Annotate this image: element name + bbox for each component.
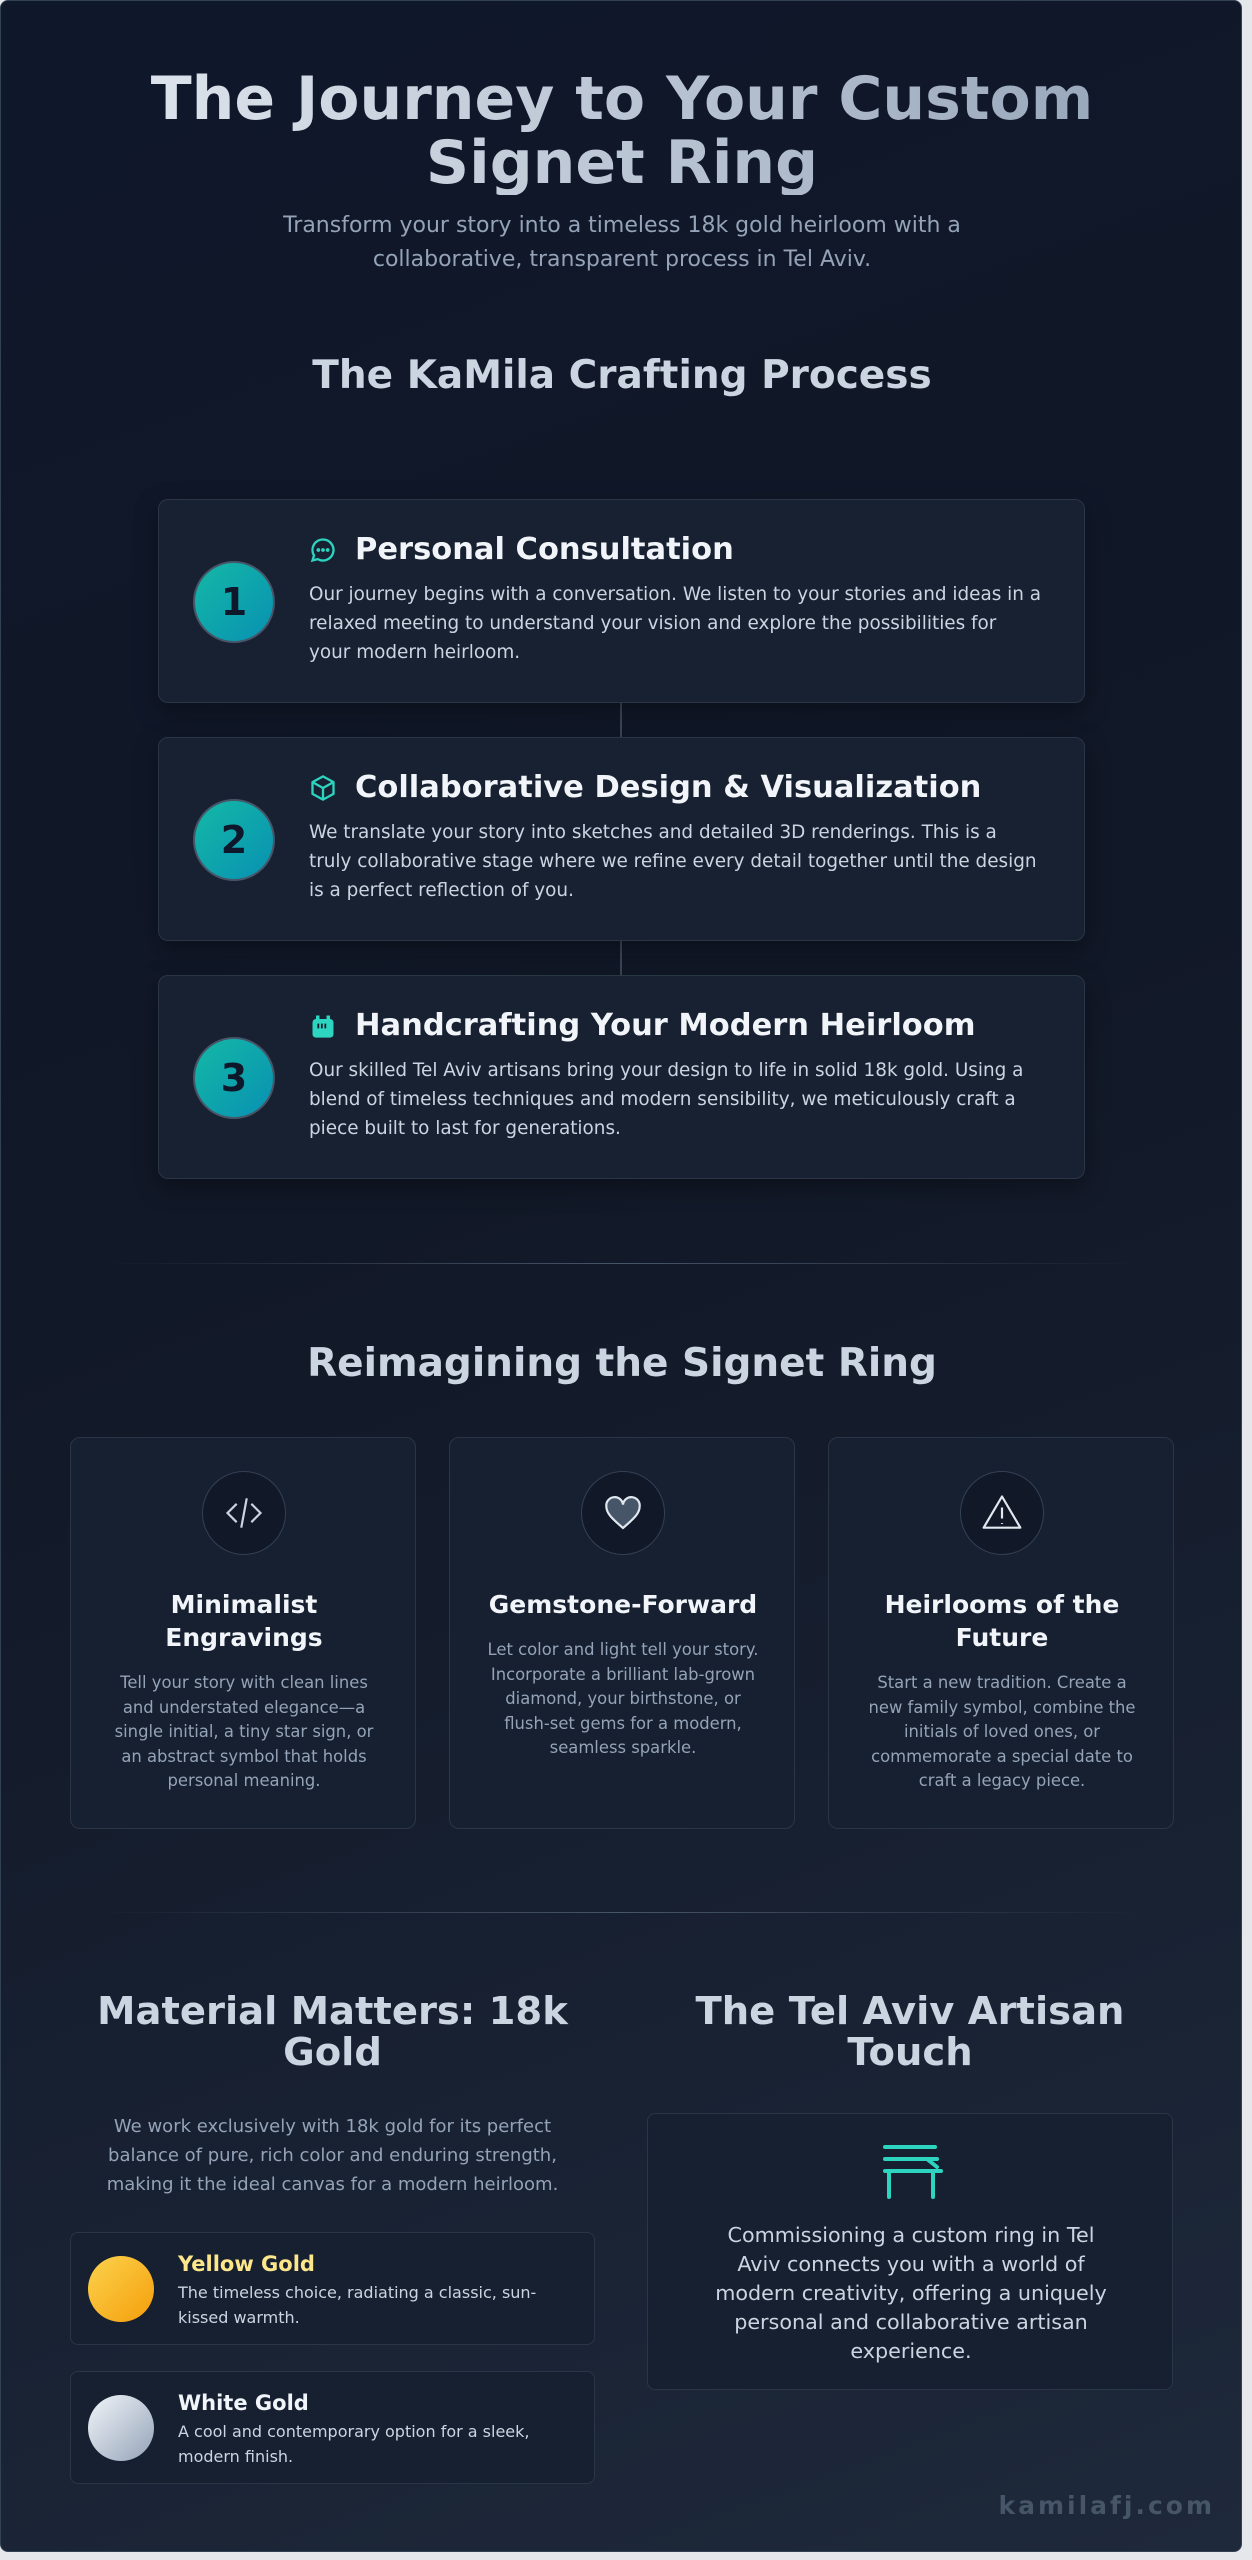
artisan card [647, 2113, 1173, 2390]
number 3 [193, 1037, 275, 1119]
swatch yellow [88, 2256, 154, 2322]
white gold card [70, 2371, 595, 2484]
heading: tel aviv artisan [696, 1989, 1124, 2075]
icon: code [202, 1471, 286, 1555]
step 1 text: Our journey begins with a conversation. We listen to your stories and ideas in a relaxed meeting to understand your vision and explore the possibilities for your modern heirloom. [309, 584, 1041, 663]
title: Yellow Gold [178, 2252, 315, 2276]
title: The Journey to Your Custom [151, 64, 1093, 134]
heading: tel aviv artisan: Touch [847, 2030, 973, 2075]
icon: warning [960, 1471, 1044, 1555]
card title: Gemstone-Forward [489, 1590, 757, 1619]
artisan text: Commissioning a custom ring in Tel Aviv connects you with a world of modern creativity, offering a uniquely personal and collaborative artisan experience. [715, 2223, 1107, 2363]
number 2 [193, 799, 275, 881]
card text: Start a new tradition. Create a new family symbol, combine the initials of loved ones, or commemorate a special date to craft a legacy piece. [868, 1673, 1136, 1790]
number 1: 1 [221, 580, 247, 624]
card title: Minimalist [171, 1590, 317, 1619]
heading: material matters [97, 1989, 568, 2075]
footer brand: kamilafj.com [998, 2491, 1215, 2520]
step 3 text: Our skilled Tel Aviv artisans bring your design to life in solid 18k gold. Using a blend of timeless techniques and modern sensibility, we meticulously craft a piece built to last for generations. [309, 1060, 1023, 1139]
heading: tel aviv artisan: The Tel Aviv Artisan [696, 1989, 1124, 2034]
card title [165, 1590, 323, 1652]
yellow gold card [70, 2232, 595, 2345]
heading: material matters: Material Matters: 18k [97, 1989, 568, 2034]
card: minimalist engravings [70, 1437, 416, 1829]
step 2 text: We translate your story into sketches and detailed 3D renderings. This is a truly collaborative stage where we refine every detail together until the design is a perfect reflection of you. [309, 822, 1037, 901]
step 3 heading: Handcrafting Your Modern Heirloom [355, 1008, 975, 1043]
number 3: 3 [221, 1056, 247, 1100]
title: White Gold [178, 2391, 309, 2415]
card title: Future [956, 1623, 1048, 1652]
title [61, 67, 1183, 195]
card title [885, 1590, 1119, 1652]
card: gemstone-forward [449, 1437, 795, 1829]
connector line [620, 601, 622, 1001]
title: Signet Ring [426, 128, 818, 198]
card title: Heirlooms of the [885, 1590, 1119, 1619]
text: The timeless choice, radiating a classic, sun-kissed warmth. [178, 2283, 536, 2327]
number 1 [193, 561, 275, 643]
heading: material matters: Gold [283, 2030, 382, 2075]
heading: reimagining: Reimagining the Signet Ring [307, 1341, 937, 1386]
card text: Let color and light tell your story. Incorporate a brilliant lab-grown diamond, your birthstone, or flush-set gems for a modern, seamless sparkle. [488, 1640, 758, 1757]
step 1 heading: Personal Consultation [355, 532, 734, 567]
text: A cool and contemporary option for a sleek, modern finish. [178, 2422, 530, 2466]
step 2 heading: Collaborative Design & Visualization [355, 770, 981, 805]
card text: Tell your story with clean lines and understated elegance—a single initial, a tiny star sign, or an abstract symbol that holds personal meaning. [115, 1673, 373, 1790]
step 3 [158, 975, 1085, 1179]
swatch white [88, 2395, 154, 2461]
step 2 [158, 737, 1085, 941]
step 1 [158, 499, 1085, 703]
card: heirlooms of the future [828, 1437, 1174, 1829]
subtitle: Transform your story into a timeless 18k gold heirloom with a collaborative, transparent process in Tel Aviv. [283, 213, 961, 272]
number 2: 2 [221, 818, 247, 862]
card title: Engravings [165, 1623, 323, 1652]
icon: heart [581, 1471, 665, 1555]
heading: crafting process: The KaMila Crafting Process [312, 353, 932, 398]
icon: artisan bench [883, 2145, 943, 2199]
material paragraph: We work exclusively with 18k gold for its perfect balance of pure, rich color and enduring strength, making it the ideal canvas for a modern heirloom. [107, 2116, 558, 2195]
